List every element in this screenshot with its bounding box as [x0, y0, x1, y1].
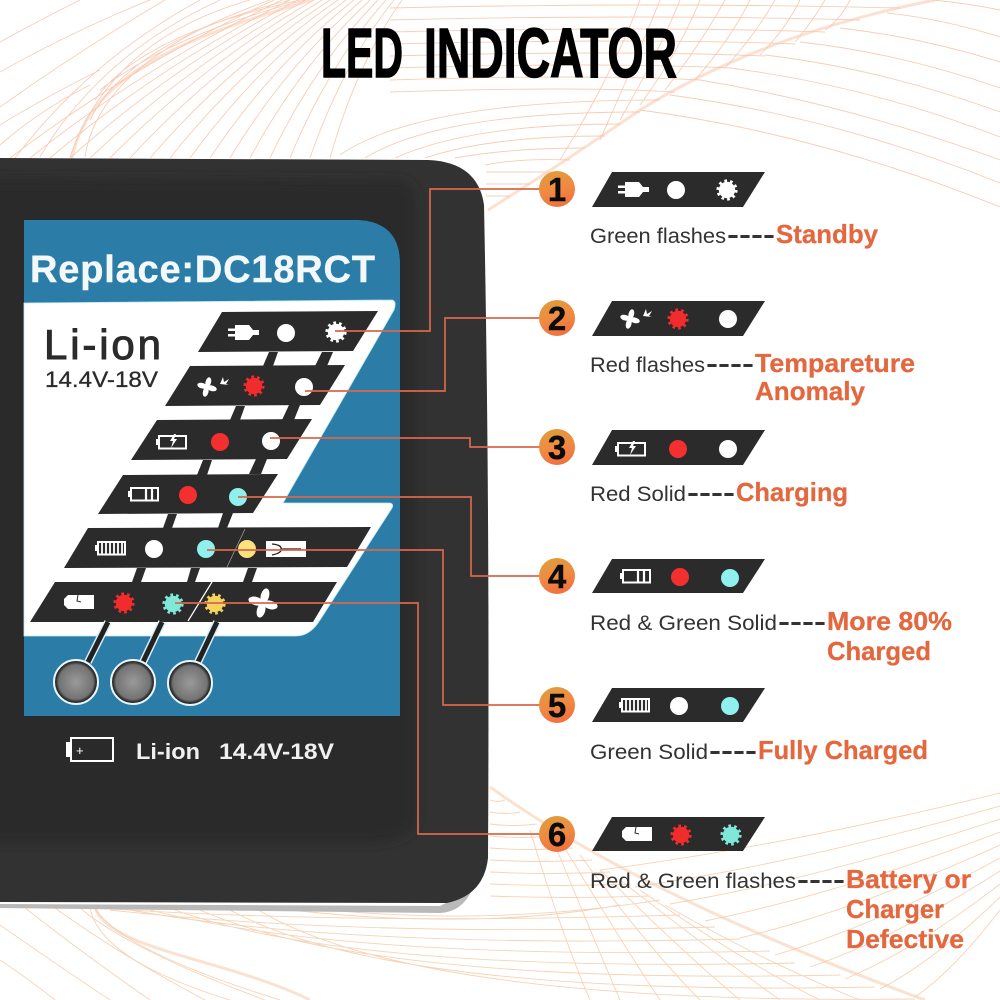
item 5: fully charged: Green Solid	[590, 741, 708, 764]
item 5: fully charged: 5	[548, 687, 566, 724]
device spec strip	[66, 738, 334, 764]
item 4: more than 80% charged: ----	[778, 608, 826, 636]
charger device	[0, 158, 488, 913]
device spec strip: +	[76, 743, 84, 758]
item 2: temperature anomaly: Tempareture	[755, 348, 915, 378]
item 3: charging: Charging	[736, 477, 848, 507]
item 6: battery or charger defective: ----	[797, 866, 845, 894]
item 1: standby: ----	[727, 221, 775, 249]
model name: Replace:DC18RCT	[30, 249, 375, 291]
item 5: fully charged: ----	[709, 737, 757, 765]
item 6: battery or charger defective: Defective	[846, 924, 964, 954]
item 1: standby	[539, 171, 879, 249]
item 3: charging: Red Solid	[590, 483, 686, 506]
leader lines	[175, 189, 540, 834]
Li-ion heading: Li-ion	[44, 321, 161, 368]
item 4: more than 80% charged: Red & Green Solid	[590, 612, 777, 635]
item 6: battery or charger defective: 6	[548, 816, 566, 853]
control buttons	[54, 622, 217, 705]
background lower ridge bands	[95, 787, 925, 1000]
item 6: battery or charger defective	[539, 816, 971, 954]
screen: white panel	[24, 300, 395, 636]
item 1: standby: 1	[548, 171, 566, 208]
item 2: temperature anomaly: Anomaly	[755, 376, 866, 406]
item 2: temperature anomaly: ----	[706, 350, 754, 378]
voltage: 14.4V-18V	[45, 367, 158, 392]
item 3: charging: ----	[687, 479, 735, 507]
screen: blue label panel	[24, 220, 400, 716]
item 2: temperature anomaly	[539, 300, 915, 406]
background wave line pattern	[0, 0, 1000, 207]
background ridge bands	[72, 0, 935, 210]
device spec strip: 14.4V-18V	[219, 739, 334, 764]
indicator bars on screen	[30, 311, 378, 622]
title	[321, 14, 677, 92]
item 1: standby: Standby	[776, 219, 879, 249]
item 3: charging: 3	[548, 429, 566, 466]
item 6: battery or charger defective: Red & Green flashes	[590, 870, 796, 893]
item 3: charging	[539, 429, 848, 507]
item 4: more than 80% charged: 4	[548, 558, 567, 595]
item 4: more than 80% charged	[539, 558, 952, 666]
item 4: more than 80% charged: More 80%	[827, 606, 952, 636]
item 6: battery or charger defective: Battery or	[846, 864, 971, 894]
title: LED	[321, 14, 403, 92]
item 1: standby: Green flashes	[590, 225, 726, 248]
item 5: fully charged	[539, 687, 928, 765]
item 4: more than 80% charged: Charged	[827, 636, 931, 666]
item 2: temperature anomaly: 2	[548, 300, 566, 337]
title: INDICATOR	[424, 14, 677, 92]
device spec strip: Li-ion	[136, 739, 200, 764]
item 5: fully charged: Fully Charged	[758, 735, 928, 765]
screen icons and LEDs	[64, 323, 345, 619]
item 2: temperature anomaly: Red flashes	[590, 354, 705, 377]
item 6: battery or charger defective: Charger	[846, 894, 944, 924]
